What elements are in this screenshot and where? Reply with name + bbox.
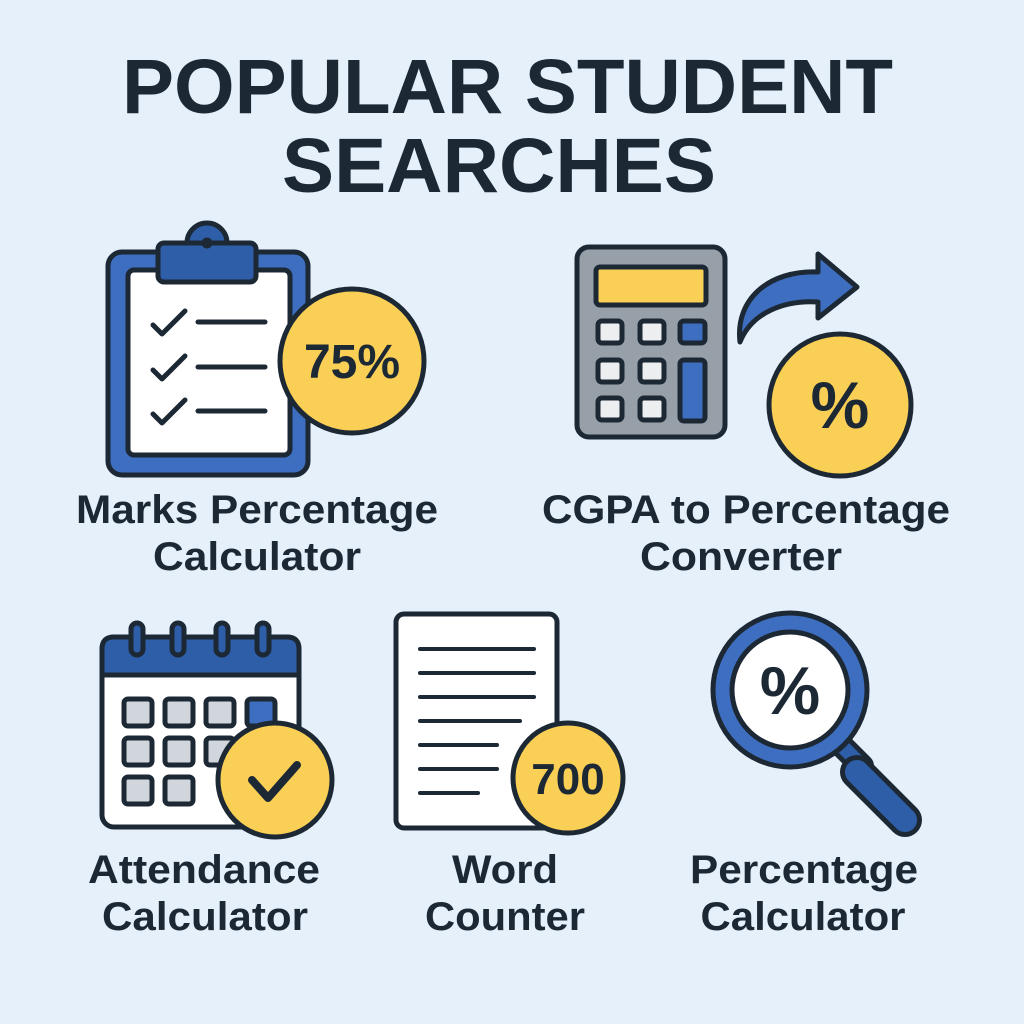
label: cgpa to percentage converter: Converter [640, 535, 842, 579]
label: percentage calculator: Calculator [700, 895, 906, 939]
text: % [811, 368, 869, 442]
text: 700 [531, 755, 605, 804]
label: word counter: Counter [425, 895, 585, 939]
icon: document with 700 [396, 614, 623, 833]
icon: calendar with check [102, 623, 332, 837]
label: word counter [425, 848, 585, 939]
label: percentage calculator [690, 848, 918, 939]
title [122, 44, 893, 209]
text: % [760, 653, 820, 729]
label: marks percentage calculator [76, 488, 438, 579]
label: percentage calculator: Percentage [690, 848, 918, 892]
icon: calculator with arrow and % [577, 247, 911, 476]
label: cgpa to percentage converter [542, 488, 950, 579]
label: word counter: Word [452, 848, 558, 892]
title: SEARCHES [282, 123, 716, 209]
label: attendance calculator: Attendance [88, 848, 320, 892]
label: marks percentage calculator: Marks Percentage [76, 488, 438, 532]
icon: magnifier with % [713, 613, 905, 820]
label: attendance calculator [88, 848, 320, 939]
label: cgpa to percentage converter: CGPA to Percentage [542, 488, 950, 532]
label: attendance calculator: Calculator [102, 895, 308, 939]
title: POPULAR STUDENT [122, 44, 893, 130]
icon: clipboard with 75% [108, 223, 424, 475]
label: marks percentage calculator: Calculator [153, 535, 361, 579]
text: 75% [304, 336, 400, 389]
